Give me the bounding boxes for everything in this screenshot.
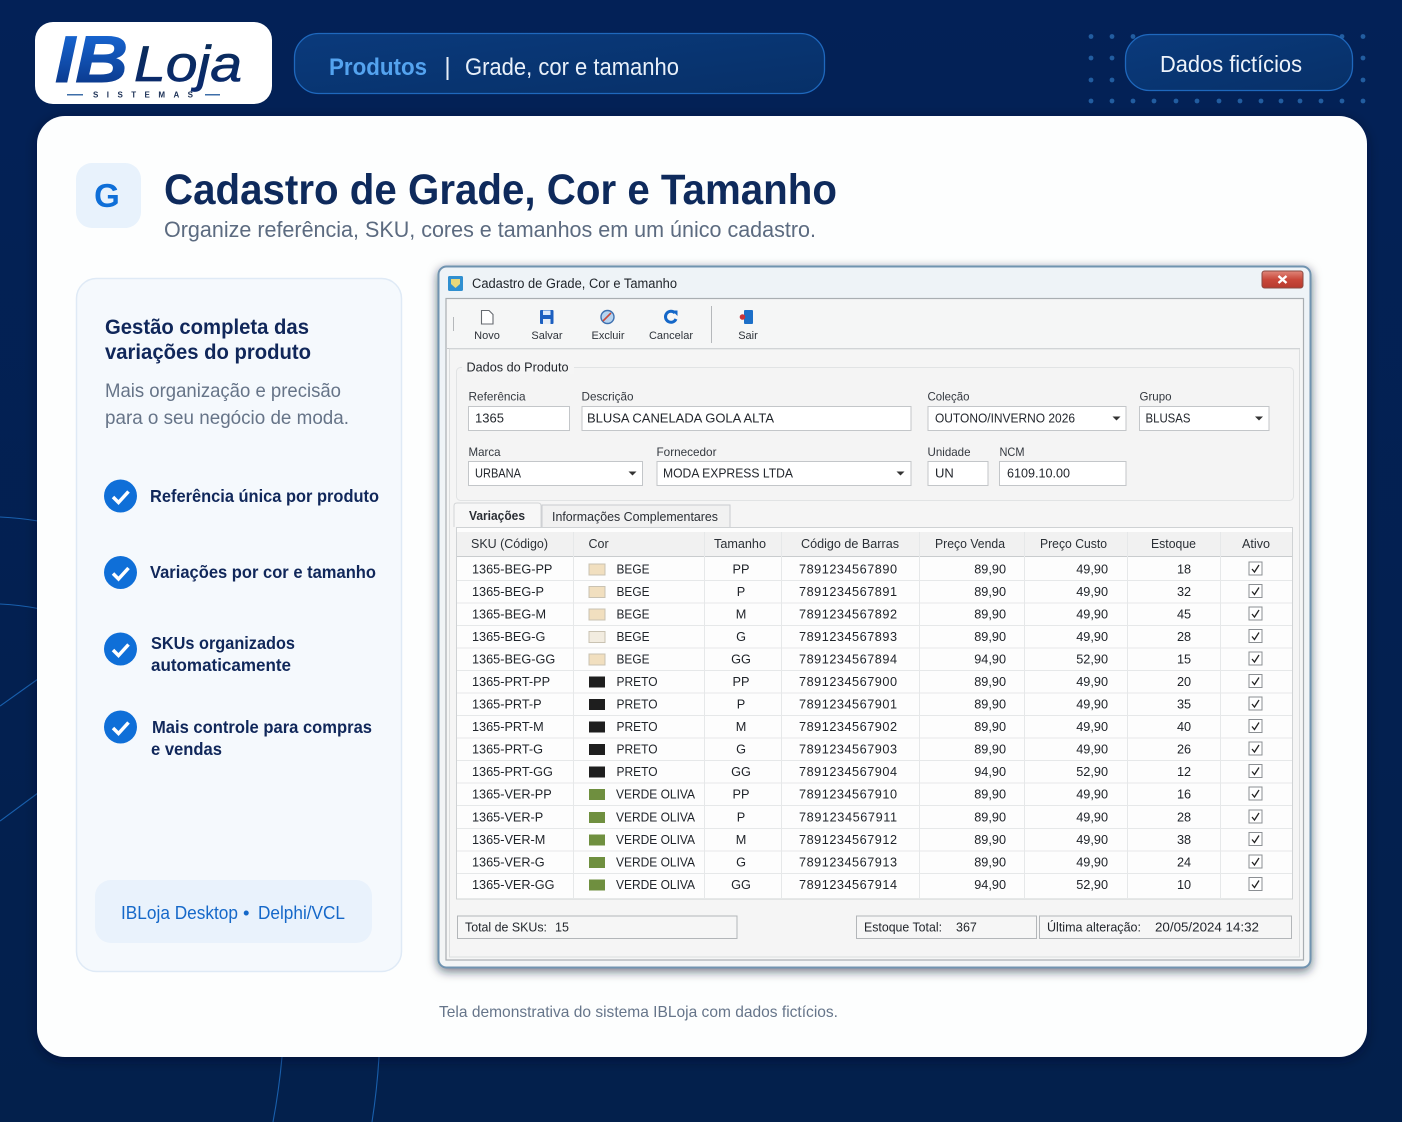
row 15: VERDE OLIVA bbox=[616, 878, 696, 892]
field: coleção: Coleção bbox=[928, 390, 970, 404]
group: dados do produto: Dados do Produto bbox=[466, 360, 568, 374]
row 5: 15 bbox=[1177, 652, 1191, 666]
icon: novo: Novo bbox=[474, 330, 500, 342]
field: referência bbox=[468, 390, 570, 430]
row 15: GG bbox=[731, 878, 751, 892]
row 12: 1365-VER-P bbox=[472, 810, 543, 824]
item: mais controle: Mais controle para compras bbox=[152, 717, 372, 737]
table header: Código de Barras bbox=[801, 537, 899, 551]
field: marca bbox=[468, 445, 642, 486]
table header: Preço Custo bbox=[1040, 537, 1107, 551]
row 13: 38 bbox=[1177, 833, 1191, 847]
row 1 bbox=[472, 562, 1262, 576]
footnote: Tela demonstrativa do sistema IBLoja com dados fictícios. bbox=[439, 1004, 838, 1021]
row 4: BEGE bbox=[616, 630, 650, 644]
row 9 bbox=[472, 742, 1262, 756]
item: SKUs bbox=[104, 632, 295, 675]
panel heading: Gestão completa das bbox=[105, 315, 309, 339]
icon: excluir bbox=[591, 310, 625, 342]
row 14: VERDE OLIVA bbox=[616, 856, 696, 870]
row 7: 35 bbox=[1177, 698, 1191, 712]
row 8 bbox=[472, 720, 1262, 734]
row 8: 1365-PRT-M bbox=[472, 720, 544, 734]
icon: cancelar: Cancelar bbox=[649, 330, 693, 342]
icon: novo bbox=[474, 310, 500, 342]
status bar bbox=[458, 916, 1292, 938]
row 9: 1365-PRT-G bbox=[472, 742, 543, 756]
field: unidade: Unidade bbox=[928, 445, 971, 459]
panel: benefícios bbox=[76, 278, 402, 972]
field: coleção: OUTONO/INVERNO 2026 bbox=[935, 410, 1075, 426]
logo: IBLoja Sistemas: Loja bbox=[134, 36, 242, 92]
breadcrumb pill: Grade, cor e tamanho bbox=[465, 54, 679, 81]
field: descrição: Descrição bbox=[582, 390, 634, 404]
row 12: 49,90 bbox=[1076, 810, 1108, 824]
row 8: 49,90 bbox=[1076, 720, 1108, 734]
row 14: 1365-VER-G bbox=[472, 856, 545, 870]
icon: sair bbox=[738, 310, 758, 342]
row 15 bbox=[472, 878, 1262, 892]
row 2: BEGE bbox=[616, 585, 650, 599]
status bar: 20/05/2024 14:32 bbox=[1155, 920, 1259, 934]
field: referência: Referência bbox=[468, 390, 526, 404]
row 6: 89,90 bbox=[974, 675, 1006, 689]
status bar: Total de SKUs: bbox=[465, 920, 547, 934]
row 15: 7891234567914 bbox=[799, 878, 897, 892]
field: fornecedor bbox=[656, 445, 911, 486]
row 15: 10 bbox=[1177, 878, 1191, 892]
row 10: 7891234567904 bbox=[799, 765, 897, 779]
field: unidade: UN bbox=[935, 466, 954, 480]
row 4: G bbox=[736, 630, 746, 644]
badge: dados fictícios: Dados fictícios bbox=[1160, 51, 1302, 77]
row 13: M bbox=[736, 833, 746, 847]
row 9: 7891234567903 bbox=[799, 742, 897, 756]
breadcrumb pill bbox=[294, 34, 824, 94]
toolbar bbox=[447, 306, 1300, 348]
row 5: 7891234567894 bbox=[799, 652, 897, 666]
row 6: PRETO bbox=[616, 675, 658, 689]
field: marca: Marca bbox=[468, 445, 501, 459]
field: marca: URBANA bbox=[475, 466, 521, 480]
row 3: M bbox=[736, 608, 746, 622]
table header: Preço Venda bbox=[935, 537, 1005, 551]
row 8: 7891234567902 bbox=[799, 720, 897, 734]
row 2: 7891234567891 bbox=[799, 585, 897, 599]
row 2: 1365-BEG-P bbox=[472, 585, 544, 599]
row 14 bbox=[472, 855, 1262, 870]
row 12: 28 bbox=[1177, 810, 1191, 824]
row 1: 89,90 bbox=[974, 562, 1006, 576]
row 6: 49,90 bbox=[1076, 675, 1108, 689]
row 9: 26 bbox=[1177, 742, 1191, 756]
row 5: GG bbox=[731, 652, 751, 666]
row 14: 49,90 bbox=[1076, 856, 1108, 870]
row 7: PRETO bbox=[616, 698, 658, 712]
row 11: 16 bbox=[1177, 788, 1191, 802]
row 5 bbox=[472, 652, 1262, 666]
tabs bbox=[454, 503, 730, 527]
table header bbox=[457, 532, 1292, 556]
row 10: 94,90 bbox=[974, 765, 1006, 779]
row 6: 7891234567900 bbox=[799, 675, 897, 689]
row 11: 1365-VER-PP bbox=[472, 788, 552, 802]
tag: plataforma bbox=[95, 880, 372, 943]
breadcrumb pill: Produtos bbox=[329, 54, 427, 81]
row 5: BEGE bbox=[616, 652, 650, 666]
item: SKUs: automaticamente bbox=[151, 655, 291, 675]
row 13 bbox=[472, 832, 1262, 847]
row 1: PP bbox=[733, 562, 749, 576]
icon: salvar bbox=[531, 310, 563, 342]
table header: Ativo bbox=[1242, 537, 1270, 551]
row 11: 7891234567910 bbox=[799, 788, 897, 802]
row 9: PRETO bbox=[616, 742, 658, 756]
row 4: 7891234567893 bbox=[799, 630, 897, 644]
row 15: 94,90 bbox=[974, 878, 1006, 892]
item: referência única bbox=[104, 480, 379, 512]
field: referência: 1365 bbox=[475, 410, 504, 426]
subtitle: Organize referência, SKU, cores e tamanhos em um único cadastro. bbox=[164, 217, 816, 242]
field: grupo: Grupo bbox=[1140, 390, 1172, 404]
row 10: 52,90 bbox=[1076, 765, 1108, 779]
row 2: 32 bbox=[1177, 585, 1191, 599]
row 13: 7891234567912 bbox=[799, 833, 897, 847]
tag: plataforma: • bbox=[243, 902, 249, 923]
row 14: G bbox=[736, 856, 746, 870]
field: grupo: BLUSAS bbox=[1146, 410, 1191, 426]
item: SKUs: SKUs organizados bbox=[151, 633, 295, 653]
field: coleção bbox=[928, 390, 1126, 430]
row 7: 1365-PRT-P bbox=[472, 698, 542, 712]
row 2: 49,90 bbox=[1076, 585, 1108, 599]
row 13: 89,90 bbox=[974, 833, 1006, 847]
icon: excluir: Excluir bbox=[591, 330, 625, 342]
field: grupo bbox=[1140, 390, 1269, 430]
row 1: 49,90 bbox=[1076, 562, 1108, 576]
row 10 bbox=[472, 764, 1262, 779]
panel description: Mais organização e precisão bbox=[105, 380, 341, 402]
logo: IBLoja Sistemas bbox=[35, 22, 272, 104]
status bar: 367 bbox=[956, 920, 977, 934]
row 11: PP bbox=[733, 788, 749, 802]
group: dados do produto bbox=[456, 360, 1294, 500]
row 9: 89,90 bbox=[974, 742, 1006, 756]
item: variações: Variações por cor e tamanho bbox=[150, 562, 376, 582]
row 7: 7891234567901 bbox=[799, 698, 897, 712]
row 6: PP bbox=[733, 675, 749, 689]
field: descrição: BLUSA CANELADA GOLA ALTA bbox=[587, 410, 774, 426]
row 11: 49,90 bbox=[1076, 788, 1108, 802]
field: NCM: 6109.10.00 bbox=[1007, 466, 1070, 480]
row 15: 52,90 bbox=[1076, 878, 1108, 892]
row 10: PRETO bbox=[616, 765, 658, 779]
field: unidade bbox=[928, 445, 988, 486]
row 2: P bbox=[737, 585, 745, 599]
row 7: 49,90 bbox=[1076, 698, 1108, 712]
row 5: 1365-BEG-GG bbox=[472, 652, 555, 666]
row 11: 89,90 bbox=[974, 788, 1006, 802]
icon: letter G: G bbox=[94, 177, 120, 214]
row 3: 1365-BEG-M bbox=[472, 608, 546, 622]
row 13: 1365-VER-M bbox=[472, 833, 545, 847]
panel description: para o seu negócio de moda. bbox=[105, 407, 349, 429]
icon: letter G bbox=[76, 163, 141, 228]
row 12: VERDE OLIVA bbox=[616, 810, 696, 824]
row 4: 1365-BEG-G bbox=[472, 630, 545, 644]
row 13: VERDE OLIVA bbox=[616, 833, 696, 847]
icon: salvar: Salvar bbox=[531, 330, 563, 342]
item: variações bbox=[104, 556, 376, 589]
desktop window bbox=[438, 266, 1310, 968]
status bar: Última alteração: bbox=[1047, 920, 1141, 934]
panel heading: variações do produto bbox=[105, 340, 311, 364]
row 10: 12 bbox=[1177, 765, 1191, 779]
row 8: PRETO bbox=[616, 720, 658, 734]
icon: cancelar bbox=[649, 310, 693, 342]
row 3: BEGE bbox=[616, 608, 650, 622]
row 9: 49,90 bbox=[1076, 742, 1108, 756]
row 8: 40 bbox=[1177, 720, 1191, 734]
row 13: 49,90 bbox=[1076, 833, 1108, 847]
row 8: M bbox=[736, 720, 746, 734]
row 1: BEGE bbox=[616, 562, 650, 576]
window title bar: Cadastro de Grade, Cor e Tamanho bbox=[472, 276, 677, 291]
tag: plataforma: Delphi/VCL bbox=[258, 902, 345, 923]
row 4: 49,90 bbox=[1076, 630, 1108, 644]
row 1: 1365-BEG-PP bbox=[472, 562, 552, 576]
item: referência única: Referência única por produto bbox=[150, 486, 379, 506]
row 7: P bbox=[737, 698, 745, 712]
row 3: 7891234567892 bbox=[799, 608, 897, 622]
item: mais controle bbox=[104, 710, 372, 759]
field: NCM bbox=[1000, 445, 1126, 486]
logo: IBLoja Sistemas: IB bbox=[55, 22, 128, 96]
row 6: 1365-PRT-PP bbox=[472, 675, 550, 689]
row 12: 89,90 bbox=[974, 810, 1006, 824]
row 10: 1365-PRT-GG bbox=[472, 765, 553, 779]
row 4: 28 bbox=[1177, 630, 1191, 644]
field: fornecedor: Fornecedor bbox=[656, 445, 716, 459]
row 14: 7891234567913 bbox=[799, 856, 897, 870]
row 9: G bbox=[736, 742, 746, 756]
table header: Cor bbox=[588, 537, 609, 551]
icon: sair: Sair bbox=[738, 330, 758, 342]
badge: dados fictícios bbox=[1126, 34, 1352, 90]
table header: Tamanho bbox=[714, 537, 766, 551]
row 10: GG bbox=[731, 765, 751, 779]
tabs: Informações Complementares bbox=[552, 510, 718, 524]
table header: Estoque bbox=[1151, 537, 1196, 551]
row 12: P bbox=[737, 810, 745, 824]
row 5: 52,90 bbox=[1076, 652, 1108, 666]
row 6 bbox=[472, 674, 1262, 689]
window title bar bbox=[448, 271, 1303, 291]
row 15: 1365-VER-GG bbox=[472, 878, 554, 892]
row 12: 7891234567911 bbox=[799, 810, 897, 824]
row 2: 89,90 bbox=[974, 585, 1006, 599]
row 8: 89,90 bbox=[974, 720, 1006, 734]
row 3: 45 bbox=[1177, 608, 1191, 622]
status bar: Estoque Total: bbox=[864, 920, 942, 934]
row 3 bbox=[472, 607, 1262, 622]
field: fornecedor: MODA EXPRESS LTDA bbox=[663, 466, 793, 480]
main white card bbox=[37, 116, 1367, 1057]
row 11 bbox=[472, 787, 1262, 802]
row 14: 24 bbox=[1177, 856, 1191, 870]
row 14: 89,90 bbox=[974, 856, 1006, 870]
row 7 bbox=[472, 697, 1262, 712]
row 1: 18 bbox=[1177, 562, 1191, 576]
data table bbox=[456, 528, 1292, 899]
row 6: 20 bbox=[1177, 675, 1191, 689]
row 11: VERDE OLIVA bbox=[616, 788, 696, 802]
row 1: 7891234567890 bbox=[799, 562, 897, 576]
table header: SKU (Código) bbox=[471, 537, 548, 551]
field: NCM: NCM bbox=[1000, 445, 1025, 459]
tag: plataforma: IBLoja Desktop bbox=[121, 902, 238, 923]
row 4 bbox=[472, 630, 1262, 644]
title: Cadastro de Grade, Cor e Tamanho bbox=[164, 166, 837, 214]
row 3: 49,90 bbox=[1076, 608, 1108, 622]
row 4: 89,90 bbox=[974, 630, 1006, 644]
field: descrição bbox=[582, 390, 911, 430]
logo: IBLoja Sistemas: SISTEMAS bbox=[93, 90, 194, 100]
tabs: Variações bbox=[469, 509, 525, 523]
row 5: 94,90 bbox=[974, 652, 1006, 666]
item: mais controle: e vendas bbox=[151, 739, 222, 759]
row 7: 89,90 bbox=[974, 698, 1006, 712]
row 3: 89,90 bbox=[974, 608, 1006, 622]
row 12 bbox=[472, 810, 1262, 824]
row 2 bbox=[472, 584, 1262, 599]
status bar: 15 bbox=[555, 920, 569, 934]
